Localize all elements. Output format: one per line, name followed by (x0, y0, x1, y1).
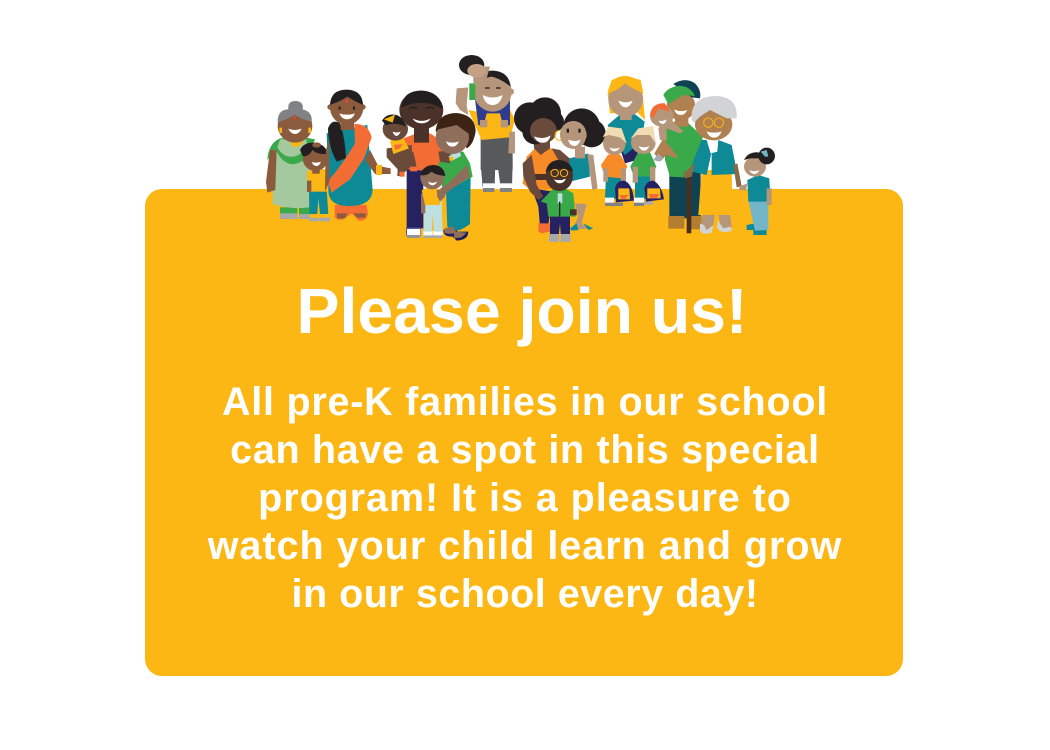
figure: child with glasses in green jacket (541, 160, 577, 242)
figure: toddler with orange hair (650, 103, 683, 162)
panel: yellow invitation card (145, 189, 903, 676)
text block: invitation message: program! It is a pleasure to (258, 476, 792, 520)
figure: seated woman in orange top (514, 97, 573, 233)
figure: woman in green and teal (436, 113, 476, 241)
figure: woman with curly hair in teal and yellow (560, 108, 606, 231)
figure: boy in yellow shirt (300, 142, 330, 221)
figure: boy with orange shirt and backpack (601, 127, 634, 206)
text block: invitation message: All pre-K families in our school (222, 380, 828, 424)
text block: invitation message: watch your child learn and grow (208, 524, 842, 568)
figure: father carrying child on shoulders (456, 55, 515, 192)
figure: tall man with baby (399, 91, 445, 238)
figure: boy in white trousers (420, 165, 445, 238)
text block: invitation message: can have a spot in this special (230, 428, 820, 472)
text block: invitation message (208, 380, 842, 616)
figure: grandmother in green (266, 101, 320, 219)
figure: baby in orange dress (382, 114, 417, 177)
text block: invitation message: in our school every day! (291, 572, 759, 616)
figure: woman in orange sari (325, 90, 391, 221)
figure: blonde woman in teal (608, 76, 645, 163)
title: Please join us!: Please join us! (297, 275, 747, 347)
figure: grandmother with white hair (683, 96, 742, 234)
figure: boy with green shirt and backpack (630, 126, 664, 206)
figure: girl in teal with hair bun (739, 148, 775, 235)
figure: father with green cap holding toddler (654, 80, 703, 233)
